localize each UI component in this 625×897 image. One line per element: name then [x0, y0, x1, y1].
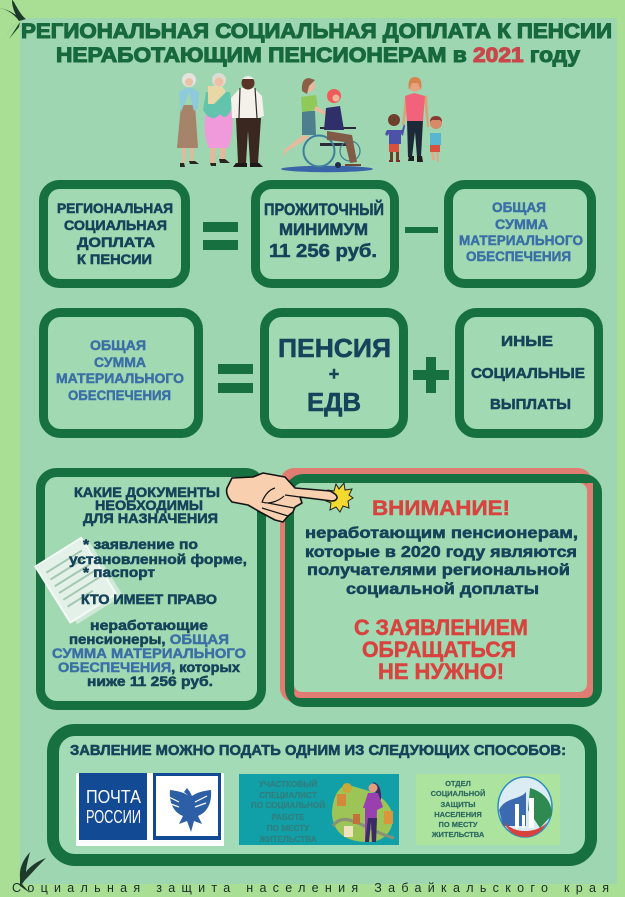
panel: total material support: [448, 184, 592, 284]
panel: subsistence minimum: 11 256 руб.: [269, 241, 377, 261]
panel: pension plus EDV: ПЕНСИЯ: [278, 333, 391, 363]
icon: minus sign: [405, 227, 438, 233]
panel: attention notice: получателями региональной: [307, 562, 570, 579]
panel: ways to apply: ЗАВЛЕНИЕ МОЖНО ПОДАТЬ ОДНИМ ИЗ СЛЕДУЮЩИХ СПОСОБОВ:: [70, 743, 566, 759]
panel: documents and eligibility: неработающие: [90, 617, 208, 633]
panel: attention notice: ОБРАЩАТЬСЯ: [362, 637, 516, 662]
panel: documents and eligibility: * паспорт: [83, 564, 155, 580]
icon: plus sign: [413, 357, 449, 393]
panel: total material support definition: МАТЕРИАЛЬНОГО: [56, 370, 184, 386]
panel: documents and eligibility: ниже 11 256 руб.: [87, 673, 213, 689]
panel: regional supplement: РЕГИОНАЛЬНАЯ: [57, 200, 173, 216]
panel: other social payments: ВЫПЛАТЫ: [490, 396, 571, 413]
panel: social protection department: ПО МЕСТУ: [438, 820, 478, 829]
logo: Russian Post: РОССИИ: [86, 807, 141, 827]
panel: total material support definition: [44, 312, 198, 434]
title: [21, 19, 612, 67]
panel: pension plus EDV: [264, 312, 404, 434]
panel: regional supplement: СОЦИАЛЬНАЯ: [64, 217, 167, 233]
panel: documents and eligibility: * заявление по: [83, 536, 198, 552]
panel: documents and eligibility: пенсионеры, ОБЩАЯ: [69, 631, 229, 647]
title: НЕРАБОТАЮЩИМ ПЕНСИОНЕРАМ в 2021 году: [56, 43, 580, 67]
panel: subsistence minimum: МИНИМУМ: [279, 220, 368, 239]
panel: district specialist: [239, 774, 399, 845]
panel: district specialist: ПО СОЦИАЛЬНОЙ: [251, 799, 325, 810]
panel: district specialist: РАБОТЕ: [271, 813, 305, 822]
icon: pointing hand: [227, 473, 353, 522]
illustration: wheelchair group: [281, 78, 373, 172]
panel: subsistence minimum: ПРОЖИТОЧНЫЙ: [264, 200, 384, 219]
panel: total material support definition: СУММА: [94, 354, 146, 370]
panel: attention notice: ВНИМАНИЕ!: [372, 497, 510, 520]
panel: social protection department: ОТДЕЛ: [445, 779, 471, 788]
panel: district specialist: ЖИТЕЛЬСТВА: [258, 835, 317, 844]
panel: social protection department: ЗАЩИТЫ: [440, 800, 476, 809]
panel: documents and eligibility: [35, 472, 262, 706]
footer caption: Социальная защита населения Забайкальского края: [12, 881, 612, 895]
icon: paper document: [35, 535, 123, 627]
panel: documents and eligibility: КТО ИМЕЕТ ПРАВО: [81, 591, 217, 607]
panel: attention notice: неработающим пенсионерам,: [305, 525, 578, 542]
panel: regional supplement: [44, 184, 186, 284]
panel: documents and eligibility: СУММА МАТЕРИАЛЬНОГО: [52, 645, 246, 661]
panel: total material support: ОБЩАЯ: [492, 200, 546, 215]
panel: attention notice: НЕ НУЖНО!: [378, 659, 504, 684]
panel: pension plus EDV: +: [329, 364, 339, 384]
title: РЕГИОНАЛЬНАЯ СОЦИАЛЬНАЯ ДОПЛАТА К ПЕНСИИ: [21, 19, 612, 43]
illustration: mother and children: [385, 77, 442, 162]
panel: documents and eligibility: ОБЕСПЕЧЕНИЯ , которых: [58, 659, 240, 675]
logo: Russian Post: [76, 773, 224, 846]
icon: equals sign: [203, 222, 238, 250]
panel: other social payments: [460, 312, 598, 434]
panel: regional supplement: ДОПЛАТА: [77, 234, 155, 250]
logo: Russian Post: ПОЧТА: [86, 787, 141, 807]
panel: total material support: МАТЕРИАЛЬНОГО: [459, 233, 583, 248]
panel: ways to apply: [53, 730, 591, 860]
icon: equals sign: [218, 364, 253, 393]
panel: social protection department: НАСЕЛЕНИЯ: [434, 810, 482, 819]
panel: total material support: ОБЕСПЕЧЕНИЯ: [466, 249, 571, 264]
panel: other social payments: ИНЫЕ: [501, 333, 553, 350]
icon: swallow bottom: [20, 852, 46, 893]
panel: regional supplement: К ПЕНСИИ: [77, 251, 152, 267]
panel: district specialist: УЧАСТКОВЫЙ: [259, 778, 317, 789]
icon: swallow top: [0, 0, 26, 40]
panel: documents and eligibility: КАКИЕ ДОКУМЕНТЫ: [74, 484, 220, 500]
panel: total material support definition: ОБЕСПЕЧЕНИЯ: [68, 387, 171, 403]
panel: social protection department: [416, 774, 560, 845]
panel: documents and eligibility: ДЛЯ НАЗНАЧЕНИЯ: [83, 510, 218, 526]
panel: documents and eligibility: установленной форме,: [69, 551, 247, 567]
panel: attention notice: [280, 468, 598, 702]
panel: total material support definition: ОБЩАЯ: [90, 337, 146, 353]
illustration: elderly people: [177, 73, 264, 167]
panel: total material support: СУММА: [495, 217, 548, 232]
panel: documents and eligibility: НЕОБХОДИМЫ: [95, 497, 203, 513]
panel: social protection department: СОЦИАЛЬНОЙ: [431, 789, 485, 798]
panel: pension plus EDV: ЕДВ: [307, 387, 361, 417]
panel: other social payments: СОЦИАЛЬНЫЕ: [471, 365, 585, 382]
panel: attention notice: С ЗАЯВЛЕНИЕМ: [354, 615, 528, 640]
panel: subsistence minimum: [256, 184, 394, 284]
panel: district specialist: СПЕЦИАЛИСТ: [259, 791, 317, 800]
panel: social protection department: ЖИТЕЛЬСТВА: [431, 830, 485, 839]
panel: attention notice: социальной доплаты: [346, 581, 539, 598]
panel: district specialist: ПО МЕСТУ: [267, 824, 310, 833]
panel: attention notice: которые в 2020 году являются: [305, 544, 577, 561]
